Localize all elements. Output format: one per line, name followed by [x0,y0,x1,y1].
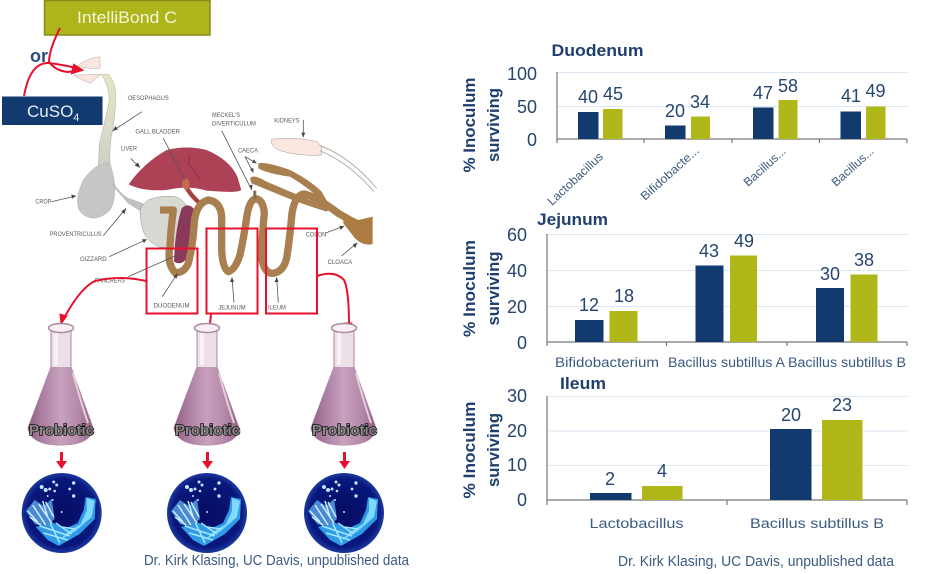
value labels: 34 [690,92,710,112]
gizzard [140,196,187,248]
y tick labels: 40 [507,261,527,281]
value labels: 20 [665,101,685,121]
petri dish 3 [304,473,384,553]
flask 2: Probiotic [175,422,240,439]
bars [590,493,632,500]
arrow: flask 2 to dish [202,452,213,469]
y tick labels: 20 [507,297,527,317]
organ labels: DIVERTICULUM [212,121,256,128]
value labels [605,395,852,489]
organ labels: DUODENUM [154,303,190,310]
caeca [258,163,327,204]
organ labels: GALL BLADDER [135,128,180,135]
y tick labels: 50 [517,97,537,117]
IntelliBond C box [44,0,210,35]
value labels [579,231,874,315]
CuSO4 box [2,96,102,125]
organ labels: COLON [306,232,327,239]
organ labels: JEJUNUM [218,304,246,311]
value labels: 4 [657,461,667,481]
organ labels: KIDNEYS [274,118,300,125]
flask 3 [311,324,377,445]
y axis title [460,78,503,172]
red feed arrows to beak [24,28,82,96]
value labels: 20 [781,405,801,425]
category labels: Bifidobacterium [555,355,659,370]
source note: right: Dr. Kirk Klasing, UC Davis, unpublished data [618,554,895,570]
flask 1 [28,324,94,445]
chart title: Duodenum [552,41,644,60]
y axis title: % Inoculum [460,78,479,172]
value labels: 45 [603,84,623,104]
value labels: 23 [832,395,852,415]
organ labels: LIVER [121,146,137,153]
anatomy diagram: avian digestive tract [35,57,377,311]
y tick labels: 60 [507,225,527,245]
y tick labels: 0 [517,333,527,353]
y tick labels: 0 [527,130,537,150]
CuSO4 box: CuSO [27,102,73,121]
category labels: Bacillus... [829,144,877,189]
Meckel's diverticulum [253,191,256,199]
organ labels: MECKEL'S [212,112,240,119]
or label: or [30,46,48,66]
y axis title: surviving [484,413,503,487]
y axis title [460,240,503,337]
beak [73,57,102,83]
y axis title: surviving [484,252,503,326]
pointer arrowheads [71,126,357,282]
gall bladder [185,185,201,204]
arrow: jejunum to flask [205,314,213,339]
petri dish 2 [167,473,247,553]
value labels: 41 [841,86,861,106]
proventriculus [113,183,143,211]
arrow: flask 1 to dish [56,452,67,469]
arrow: ileum to flask [317,274,352,329]
y tick labels: 100 [507,64,537,84]
category labels: Bacillus... [741,144,789,189]
organ labels: GIZZARD [80,256,107,263]
bars [575,320,604,342]
organ labels: CAECA [238,148,259,155]
crop [77,163,115,218]
bars [578,112,598,139]
category labels: Bifidobacte... [638,143,702,203]
flask 1: Probiotic [29,422,94,439]
y tick labels: 10 [507,455,527,475]
petri dish 1 [22,473,102,553]
cloaca [343,213,373,245]
category labels [590,516,884,531]
pointer arrows [52,112,357,303]
chart title: Jejunum [537,210,608,229]
value labels: 38 [854,250,874,270]
category labels: Lactobacillus [590,516,684,531]
CuSO4 box: 4 [73,112,79,124]
liver [129,147,241,192]
value labels: 43 [699,241,719,261]
value labels: 12 [579,295,599,315]
organ labels: CLOACA [328,259,353,266]
flask 3: Probiotic [312,422,377,439]
value labels: 58 [778,76,798,96]
y tick labels: 0 [517,490,527,510]
y tick labels [507,386,527,510]
y axis title: surviving [484,88,503,162]
organ labels [35,95,353,311]
y tick labels [507,64,537,150]
region box: jejunum [206,228,258,314]
arrow: flask 3 to dish [339,452,350,469]
region box: duodenum [146,248,198,314]
organ labels: PANCREAS [95,277,125,284]
intestine [160,194,357,273]
category labels: Lactobacillus [544,150,606,208]
y tick labels: 30 [507,386,527,406]
organ labels: PROVENTRICULUS [50,231,102,238]
y tick labels: 20 [507,421,527,441]
chart: ileum [460,374,907,531]
kidneys [271,138,322,155]
arrow: duodenum to flask [60,278,146,324]
value labels: 40 [578,87,598,107]
y axis title: % Inoculum [460,402,479,498]
chart title: Ileum [560,374,606,393]
category labels: Bacillus subtillus A [668,355,785,370]
y axis title: % Inoculum [460,240,479,337]
organ labels: CROP [35,198,51,205]
IntelliBond C box: IntelliBond C [77,8,177,27]
organ labels: OESOPHAGUS [128,95,169,102]
chart: jejunum [460,210,907,370]
source note: left: Dr. Kirk Klasing, UC Davis, unpublished data [144,553,410,569]
value labels: 49 [865,81,886,101]
chart: duodenum [460,41,907,208]
category labels: Bacillus subtillus B [788,355,906,370]
value labels: 47 [753,83,773,103]
value labels [578,76,886,121]
category labels [544,143,877,208]
oesophagus [98,74,116,187]
value labels: 2 [605,469,615,489]
y axis title [460,402,503,498]
pancreas [174,205,195,263]
flask 2 [174,324,240,445]
region box: ileum [266,228,317,314]
value labels: 30 [820,264,840,284]
category labels [555,355,906,370]
y tick labels [507,225,527,353]
value labels: 49 [734,231,754,251]
category labels: Bacillus subtillus B [750,516,884,531]
organ labels: ILEUM [268,304,286,311]
value labels: 18 [614,286,634,306]
